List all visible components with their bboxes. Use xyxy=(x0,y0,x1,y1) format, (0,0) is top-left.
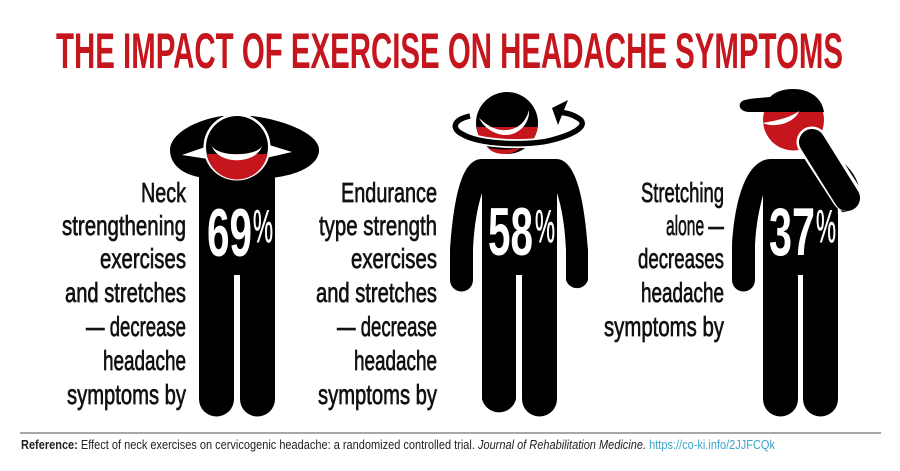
icon: person holding head with both hands xyxy=(170,114,319,416)
text block: endurance description: Endurance xyxy=(341,177,437,208)
stat: 69 percent: 69 xyxy=(207,195,252,271)
text block: endurance description: and stretches xyxy=(316,277,437,308)
stat: 58 percent: 58 xyxy=(488,194,533,270)
text block: neck strengthening description: and stretches xyxy=(65,277,186,308)
text block: neck strengthening description: headache xyxy=(103,345,186,376)
text block: stretching description: Stretching xyxy=(641,177,724,208)
icon: person rotating head xyxy=(450,92,588,416)
panel: endurance strength: % xyxy=(535,200,555,252)
panel: neck strengthening: % xyxy=(253,200,273,252)
text block: neck strengthening description: strengthening xyxy=(62,210,186,241)
panel: neck strengthening xyxy=(62,114,319,416)
stat: 37 percent: 37 xyxy=(769,194,815,270)
panel: stretching alone xyxy=(604,89,860,416)
text block: neck strengthening description: exercises xyxy=(100,243,186,274)
text block: stretching description: symptoms by xyxy=(604,311,724,342)
text block: neck strengthening description: Neck xyxy=(141,177,187,208)
panel: stretching alone: % xyxy=(816,200,836,252)
icon: person stretching neck wearing cap xyxy=(732,89,860,416)
text block: neck strengthening description xyxy=(62,177,187,410)
text block: endurance description: headache xyxy=(354,345,437,376)
text block: stretching description: headache xyxy=(641,277,724,308)
text block: endurance description: type strength xyxy=(319,210,437,241)
text block: endurance description: — decrease xyxy=(337,311,437,342)
text block: neck strengthening description: symptoms by xyxy=(67,379,186,410)
panel: endurance strength xyxy=(316,92,588,416)
text block: endurance description xyxy=(316,177,437,410)
text block: stretching description: decreases xyxy=(638,243,724,274)
text block: neck strengthening description: — decrease xyxy=(86,311,186,342)
text block: stretching description xyxy=(604,177,724,342)
text block: endurance description: symptoms by xyxy=(318,379,437,410)
reference footnote: Reference: Effect of neck exercises on cervicogenic headache: a randomized controlled trial. Journal of Rehabilitation Medicine. https://co-ki.info/2JJFCQk xyxy=(21,438,776,452)
text block: endurance description: exercises xyxy=(351,243,437,274)
text block: stretching description: alone — xyxy=(666,210,724,241)
